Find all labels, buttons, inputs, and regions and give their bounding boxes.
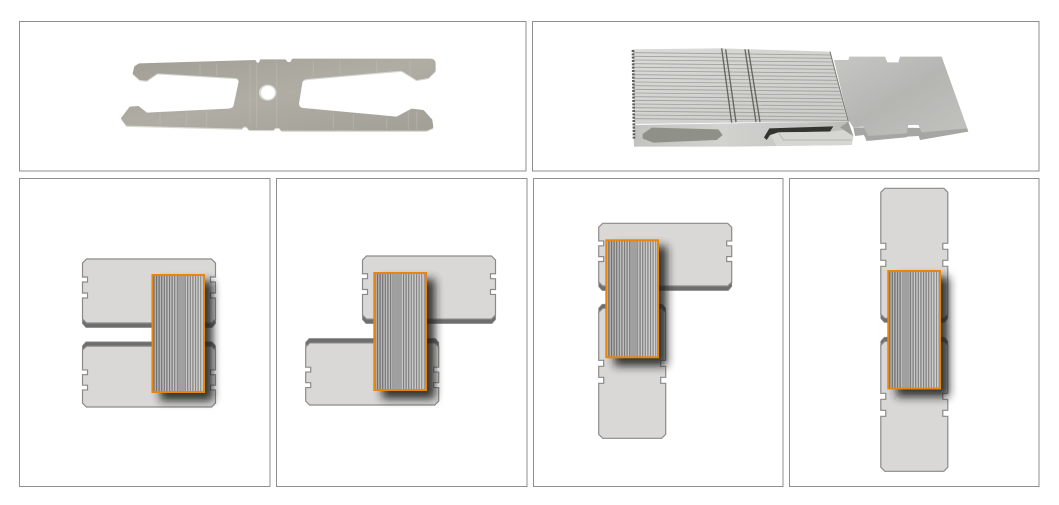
upper plate xyxy=(362,256,496,323)
panel: configuration A, two stacked plates xyxy=(20,178,270,486)
fin block xyxy=(888,271,940,388)
icon: H-shaped metal clip xyxy=(122,59,435,131)
plate side face xyxy=(853,127,968,141)
fin block top face xyxy=(633,48,848,124)
upper plate xyxy=(82,259,216,328)
fin lines xyxy=(633,53,847,120)
lower plate xyxy=(599,304,666,438)
panel: configuration B, offset plates xyxy=(276,178,527,486)
shadow xyxy=(160,281,213,401)
panel: configuration D, in-line plates xyxy=(790,178,1039,486)
right slot xyxy=(764,126,833,140)
lip xyxy=(771,130,853,146)
panel: assembled heat sink view xyxy=(532,22,1039,171)
shadow xyxy=(614,246,667,366)
panel: configuration C, L-shaped plates xyxy=(534,178,783,486)
plate top face xyxy=(834,57,967,136)
edge of fins xyxy=(633,50,634,140)
fin block front face xyxy=(633,122,853,147)
fin block xyxy=(606,240,658,357)
upper plate xyxy=(881,188,948,322)
shadow xyxy=(896,277,949,397)
grooves xyxy=(722,48,848,123)
lower plate xyxy=(306,339,439,405)
left slot xyxy=(643,128,723,143)
upper plate xyxy=(599,223,732,290)
fin block xyxy=(374,273,426,390)
shadow xyxy=(382,279,435,399)
lower plate xyxy=(881,337,948,471)
fin block xyxy=(152,275,204,392)
lower plate xyxy=(82,342,216,407)
panel: flat clip view xyxy=(20,22,526,171)
icon: finned heat sink on extended plate xyxy=(633,48,968,147)
